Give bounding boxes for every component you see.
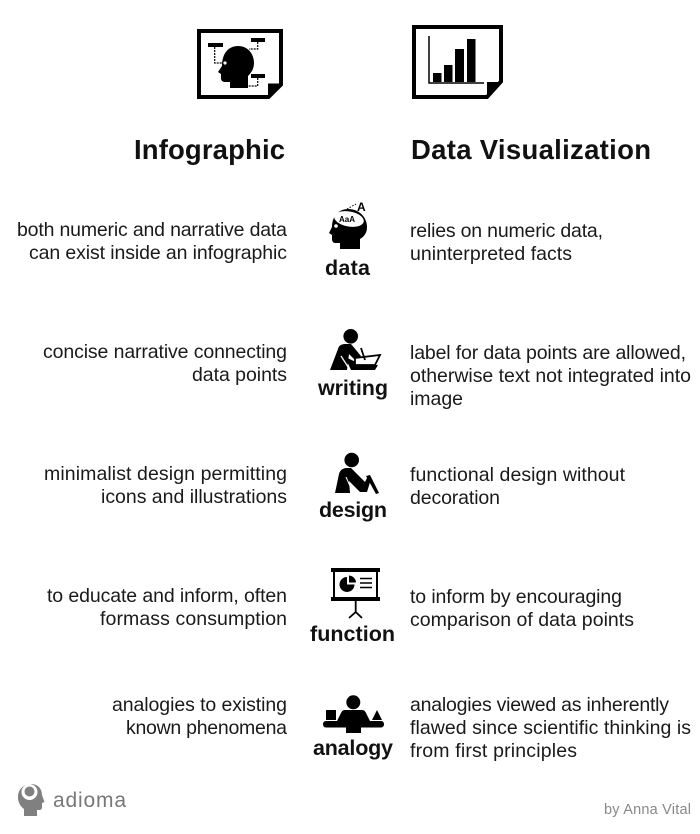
text: infographic design [44, 463, 287, 508]
text: data visualization design [410, 464, 626, 509]
text: data visualization analogy [410, 694, 691, 762]
text: infographic data [17, 219, 287, 264]
icon: person balancing shapes [323, 695, 384, 733]
text: data visualization analogy: from first principles [410, 740, 577, 762]
text: infographic writing: concise narrative connecting [43, 341, 287, 363]
heading: Infographic: Infographic [134, 134, 285, 165]
label: function: function [310, 622, 395, 646]
row: writing [43, 329, 691, 410]
row: design [44, 453, 626, 522]
text: infographic design: minimalist design permitting [44, 463, 287, 485]
text: data visualization writing: image [410, 388, 463, 410]
heading: Data Visualization: Data Visualization [411, 134, 651, 165]
text: data visualization design: decoration [410, 487, 500, 509]
icon: infographic sheet with head and callouts [199, 31, 282, 97]
row: data [17, 200, 603, 280]
credit: by Anna Vital: by Anna Vital [604, 802, 691, 818]
text: infographic analogy: analogies to existing [112, 694, 287, 716]
text: data visualization writing [410, 342, 691, 410]
text: infographic writing: data points [192, 364, 287, 386]
icon: data visualization sheet with bar chart [414, 27, 502, 97]
text: data visualization function: to inform by encouraging [410, 586, 622, 608]
label: analogy: analogy [313, 736, 393, 760]
text: infographic data: can exist inside an infographic [29, 242, 287, 264]
text: infographic analogy [112, 694, 287, 739]
text: infographic data: both numeric and narrative data [17, 219, 287, 241]
text: infographic function: to educate and inform, often [47, 585, 287, 607]
text: data visualization design: functional design without [410, 464, 626, 486]
icon: presentation board with pie chart [331, 568, 380, 618]
icon: head with letters [329, 200, 367, 249]
text: infographic analogy: known phenomena [126, 717, 287, 739]
text: data visualization analogy: flawed since scientific thinking is [410, 717, 691, 739]
text: infographic function: formass consumption [100, 608, 287, 630]
text: data visualization writing: label for data points are allowed, [410, 342, 686, 364]
text: data visualization writing: otherwise text not integrated into [410, 365, 691, 387]
row: function [47, 568, 634, 646]
icon: person drawing [335, 453, 379, 494]
text: data visualization function: comparison of data points [410, 609, 634, 631]
icon: head with letters: AaA [339, 215, 355, 224]
icon: head with letters: A [357, 200, 366, 214]
row: analogy [112, 694, 691, 762]
text: data visualization data [410, 220, 603, 265]
text: infographic design: icons and illustrations [101, 486, 287, 508]
icon: person writing at desk [330, 329, 380, 370]
label: data: data [325, 256, 371, 280]
text: data visualization analogy: analogies viewed as inherently [410, 694, 669, 716]
label: writing: writing [317, 376, 388, 400]
text: data visualization data: uninterpreted facts [410, 243, 572, 265]
text: infographic writing [43, 341, 287, 386]
text: data visualization data: relies on numeric data, [410, 220, 603, 242]
label: design: design [319, 498, 387, 522]
text: data visualization function [410, 586, 634, 631]
logo: adioma [18, 784, 126, 816]
text: infographic function [47, 585, 287, 630]
logo: adioma: adioma [53, 789, 126, 812]
